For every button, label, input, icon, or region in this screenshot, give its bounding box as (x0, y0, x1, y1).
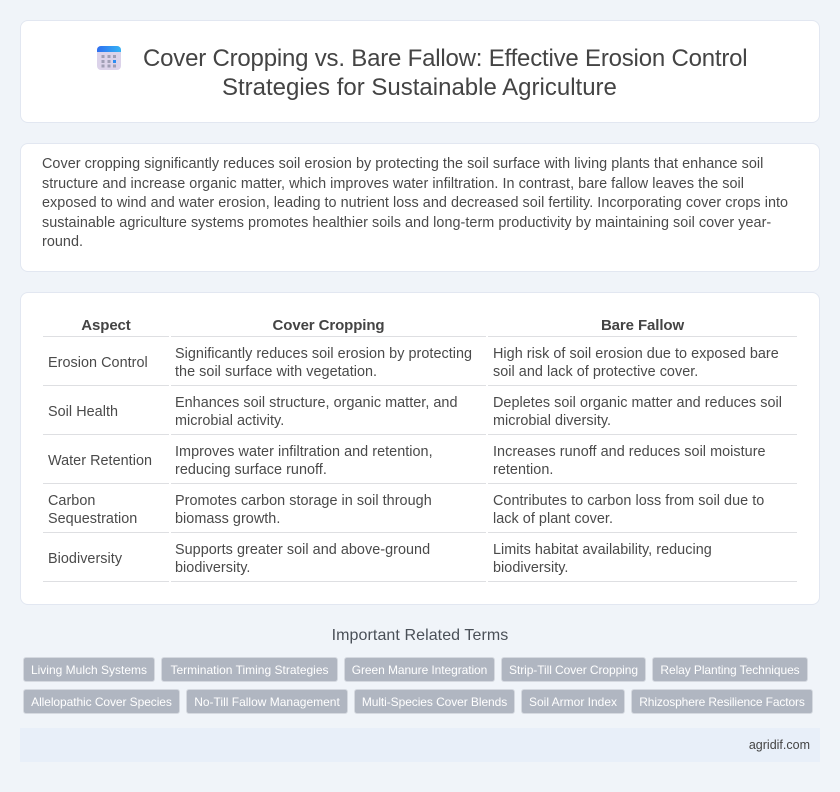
comparison table: microbial activity. (175, 413, 284, 429)
comparison table: Cover Cropping (273, 317, 384, 334)
related terms tags: No-Till Fallow Management (194, 695, 340, 709)
table panel (20, 292, 820, 605)
comparison table: Water Retention (48, 453, 152, 469)
comparison table: soil and lack of protective cover. (493, 364, 698, 380)
intro paragraph (42, 156, 788, 250)
comparison table: Supports greater soil and above-ground (175, 542, 430, 558)
comparison table: Aspect (81, 317, 131, 334)
comparison table: Promotes carbon storage in soil through (175, 493, 432, 509)
related terms tags: Relay Planting Techniques (660, 663, 800, 677)
footer bar (20, 728, 820, 762)
comparison table: retention. (493, 462, 553, 478)
title: Strategies for Sustainable Agriculture (222, 74, 617, 101)
comparison table: Sequestration (48, 511, 137, 527)
intro paragraph: sustainable agriculture systems promotes healthier soils and long-term productivity by maintaining soil cover year- (42, 215, 771, 231)
comparison table: Carbon (48, 493, 95, 509)
comparison table: Improves water infiltration and retention, (175, 444, 433, 460)
related terms tags: Living Mulch Systems (31, 663, 147, 677)
icon: calendar (97, 46, 121, 70)
comparison table (43, 317, 797, 582)
intro paragraph: exposed to wind and water erosion, leading to nutrient loss and decreased soil fertility. Incorporating cover crops into (42, 195, 788, 211)
header panel (20, 20, 820, 123)
comparison table: Erosion Control (48, 355, 148, 371)
comparison table: lack of plant cover. (493, 511, 613, 527)
title: Cover Cropping vs. Bare Fallow: Effective Erosion Control (143, 45, 747, 72)
comparison table: Bare Fallow (601, 317, 684, 334)
comparison table: the soil surface with vegetation. (175, 364, 377, 380)
related terms tags: Strip-Till Cover Cropping (509, 663, 638, 677)
title (143, 45, 747, 101)
footer source text: agridif.com (749, 738, 810, 752)
comparison table: biodiversity. (175, 560, 250, 576)
intro paragraph: structure and increase organic matter, which improves water infiltration. In contrast, bare fallow leaves the soil (42, 176, 744, 192)
comparison table: biomass growth. (175, 511, 280, 527)
comparison table: Enhances soil structure, organic matter, and (175, 395, 458, 411)
related terms tags: Soil Armor Index (529, 695, 617, 709)
related terms tags: Termination Timing Strategies (170, 663, 329, 677)
comparison table: Contributes to carbon loss from soil due to (493, 493, 764, 509)
related terms tags: Allelopathic Cover Species (31, 695, 172, 709)
related terms tags: Multi-Species Cover Blends (362, 695, 507, 709)
related terms tags: Green Manure Integration (352, 663, 487, 677)
related terms heading: Important Related Terms (332, 627, 508, 644)
intro panel (20, 143, 820, 272)
comparison table: Depletes soil organic matter and reduces soil (493, 395, 782, 411)
comparison table: Soil Health (48, 404, 118, 420)
comparison table: biodiversity. (493, 560, 568, 576)
intro paragraph: round. (42, 234, 83, 250)
comparison table: Increases runoff and reduces soil moisture (493, 444, 766, 460)
comparison table: microbial diversity. (493, 413, 611, 429)
comparison table: Significantly reduces soil erosion by protecting (175, 346, 472, 362)
related terms tags (23, 657, 813, 714)
related terms tags: Rhizosphere Resilience Factors (639, 695, 805, 709)
comparison table: High risk of soil erosion due to exposed bare (493, 346, 779, 362)
intro paragraph: Cover cropping significantly reduces soil erosion by protecting the soil surface with living plants that enhance soil (42, 156, 763, 172)
comparison table: reducing surface runoff. (175, 462, 327, 478)
comparison table: Limits habitat availability, reducing (493, 542, 712, 558)
comparison table: Biodiversity (48, 551, 122, 567)
